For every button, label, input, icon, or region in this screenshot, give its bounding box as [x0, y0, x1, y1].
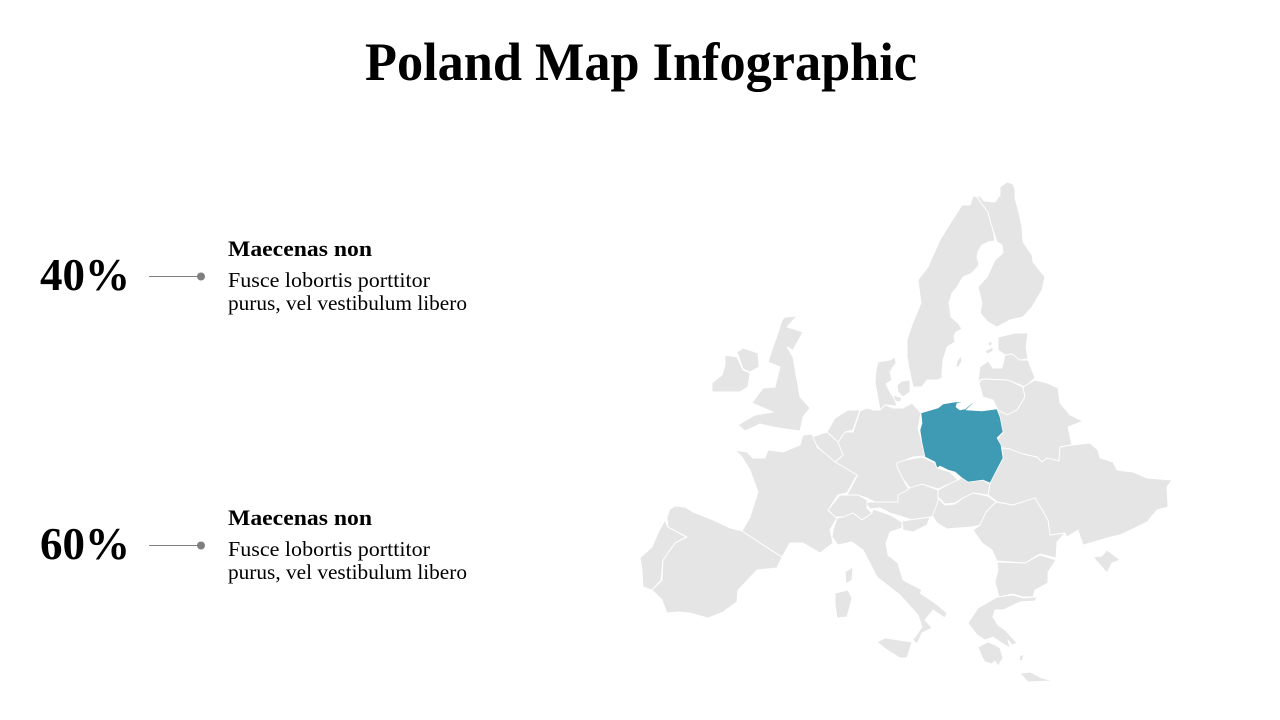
body text: Fusce lobortis porttitor	[228, 537, 430, 561]
France	[735, 434, 857, 557]
Estonia	[998, 333, 1028, 360]
Romania	[973, 498, 1065, 563]
title: Poland Map Infographic	[365, 32, 917, 92]
Portugal	[640, 520, 686, 590]
connector line with dot	[149, 272, 205, 280]
Czech Republic	[896, 457, 958, 489]
Great Britain	[738, 316, 810, 431]
Slovenia	[902, 517, 930, 532]
Poland (highlighted)	[920, 402, 1003, 483]
Ireland	[712, 355, 750, 392]
Hungary	[932, 493, 996, 529]
Germany	[835, 403, 925, 502]
Lithuania	[979, 379, 1025, 415]
panel: 60% statistic	[40, 505, 467, 584]
Austria	[865, 484, 938, 520]
Belgium and Luxembourg	[812, 432, 843, 462]
Slovakia	[938, 478, 990, 504]
Spain	[652, 506, 782, 618]
Peloponnese	[978, 642, 1003, 666]
Netherlands	[827, 410, 860, 442]
body text: purus, vel vestibulum libero	[228, 560, 467, 584]
body text	[228, 268, 467, 315]
Italy	[832, 509, 947, 644]
connector line with dot	[149, 542, 205, 550]
Sweden	[907, 196, 995, 387]
panel: 40% statistic	[40, 236, 467, 315]
Latvia	[978, 354, 1035, 387]
map of Europe with Poland highlighted	[640, 182, 1172, 682]
Finland	[977, 182, 1045, 327]
Greece mainland	[968, 595, 1037, 648]
Corsica	[845, 567, 853, 584]
Switzerland	[828, 495, 872, 520]
heading: Maecenas non	[228, 236, 373, 261]
value: 60%: 60%	[40, 518, 130, 569]
Crimea	[1093, 550, 1120, 573]
Crete and Aegean islands	[1019, 654, 1053, 682]
body text: Fusce lobortis porttitor	[228, 268, 430, 292]
Bulgaria	[995, 555, 1056, 597]
body text	[228, 537, 467, 584]
Ukraine	[988, 443, 1172, 545]
value: 40%: 40%	[40, 249, 130, 300]
Sicily	[877, 638, 912, 658]
Denmark	[875, 357, 910, 410]
heading: Maecenas non	[228, 505, 373, 530]
Gotland and Estonian islands	[956, 341, 993, 368]
Belarus	[997, 380, 1083, 462]
body text: purus, vel vestibulum libero	[228, 291, 467, 315]
Northern Ireland	[737, 348, 759, 372]
Sardinia	[835, 590, 852, 618]
